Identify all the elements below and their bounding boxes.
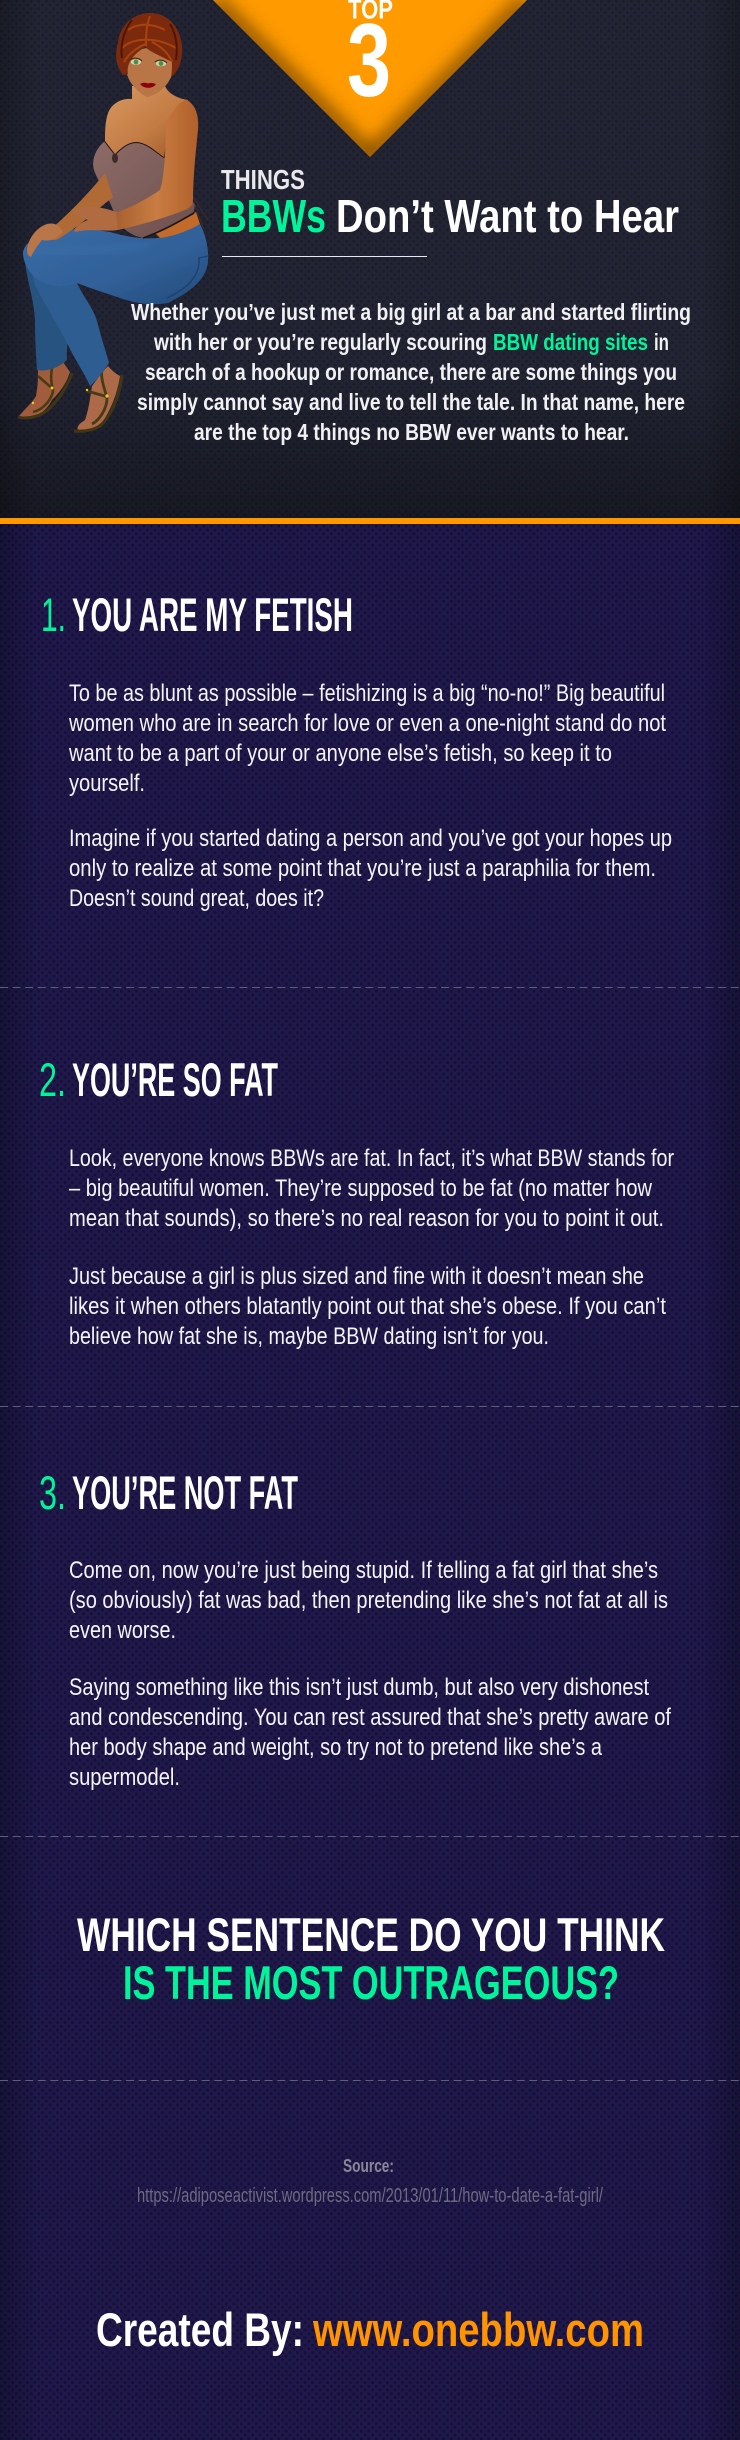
closing question	[77, 1908, 665, 2009]
panel: body background	[0, 524, 740, 2440]
created by footer: www.onebbw.com	[312, 2303, 644, 2356]
section 3 heading: YOU’RE NOT FAT	[72, 1466, 298, 1519]
jeans	[23, 224, 208, 386]
section 1 heading: YOU ARE MY FETISH	[72, 588, 353, 641]
panel: header background	[0, 0, 740, 518]
lips	[140, 83, 156, 88]
back foot with sandal	[18, 362, 72, 418]
created by footer	[96, 2303, 644, 2356]
intro paragraph: are the top 4 things no BBW ever wants to hear.	[194, 419, 629, 445]
intro paragraph: in	[654, 329, 669, 355]
section 3 text: supermodel.	[69, 1764, 180, 1791]
section 2 text	[69, 1145, 674, 1350]
illustration: seated woman	[18, 13, 208, 431]
left arm and hand	[27, 173, 113, 257]
source credit	[137, 2156, 603, 2207]
intro paragraph: with her or you’re regularly scouring	[153, 329, 487, 355]
section 1 text: yourself.	[69, 770, 145, 797]
section 2 text: believe how fat she is, maybe BBW dating isn’t for you.	[69, 1323, 549, 1350]
intro paragraph: BBW dating sites	[493, 329, 648, 355]
intro paragraph	[131, 299, 691, 445]
title accent: BBWs: BBWs	[221, 190, 326, 242]
section 3 heading: 3.	[39, 1466, 66, 1519]
section 1 heading: 1.	[41, 588, 66, 641]
section 3 text: even worse.	[69, 1617, 176, 1644]
heading: things: THINGS	[221, 164, 305, 195]
section 2 heading: YOU’RE SO FAT	[72, 1053, 278, 1106]
section 2 heading	[39, 1053, 278, 1106]
title underline	[222, 256, 427, 257]
section 1 text: want to be a part of your or anyone else’s fetish, so keep it to	[68, 740, 612, 767]
section 3 text: her body shape and weight, so try not to pretend like she’s a	[69, 1734, 603, 1761]
section 1 text: Doesn’t sound great, does it?	[69, 885, 324, 912]
section 3 heading	[39, 1466, 298, 1519]
front foot with sandal	[74, 366, 122, 431]
source credit: Source:	[343, 2156, 394, 2176]
title remainder: Don’t Want to Hear	[336, 190, 679, 242]
badge number: 3: 3	[347, 3, 391, 119]
section 3 text	[69, 1557, 671, 1791]
section 2 heading: 2.	[39, 1053, 66, 1106]
right arm and hand	[72, 100, 198, 232]
section 1 text	[68, 680, 672, 912]
created by footer: Created By:	[96, 2303, 304, 2356]
chest and neck	[105, 86, 188, 157]
eyes	[131, 59, 141, 65]
section 1 heading	[41, 588, 353, 641]
corset	[93, 141, 208, 238]
title	[221, 190, 679, 242]
badge: orange triangle with top 3	[213, 0, 527, 157]
orange divider bar	[0, 518, 740, 524]
head: face and hair	[116, 13, 182, 97]
